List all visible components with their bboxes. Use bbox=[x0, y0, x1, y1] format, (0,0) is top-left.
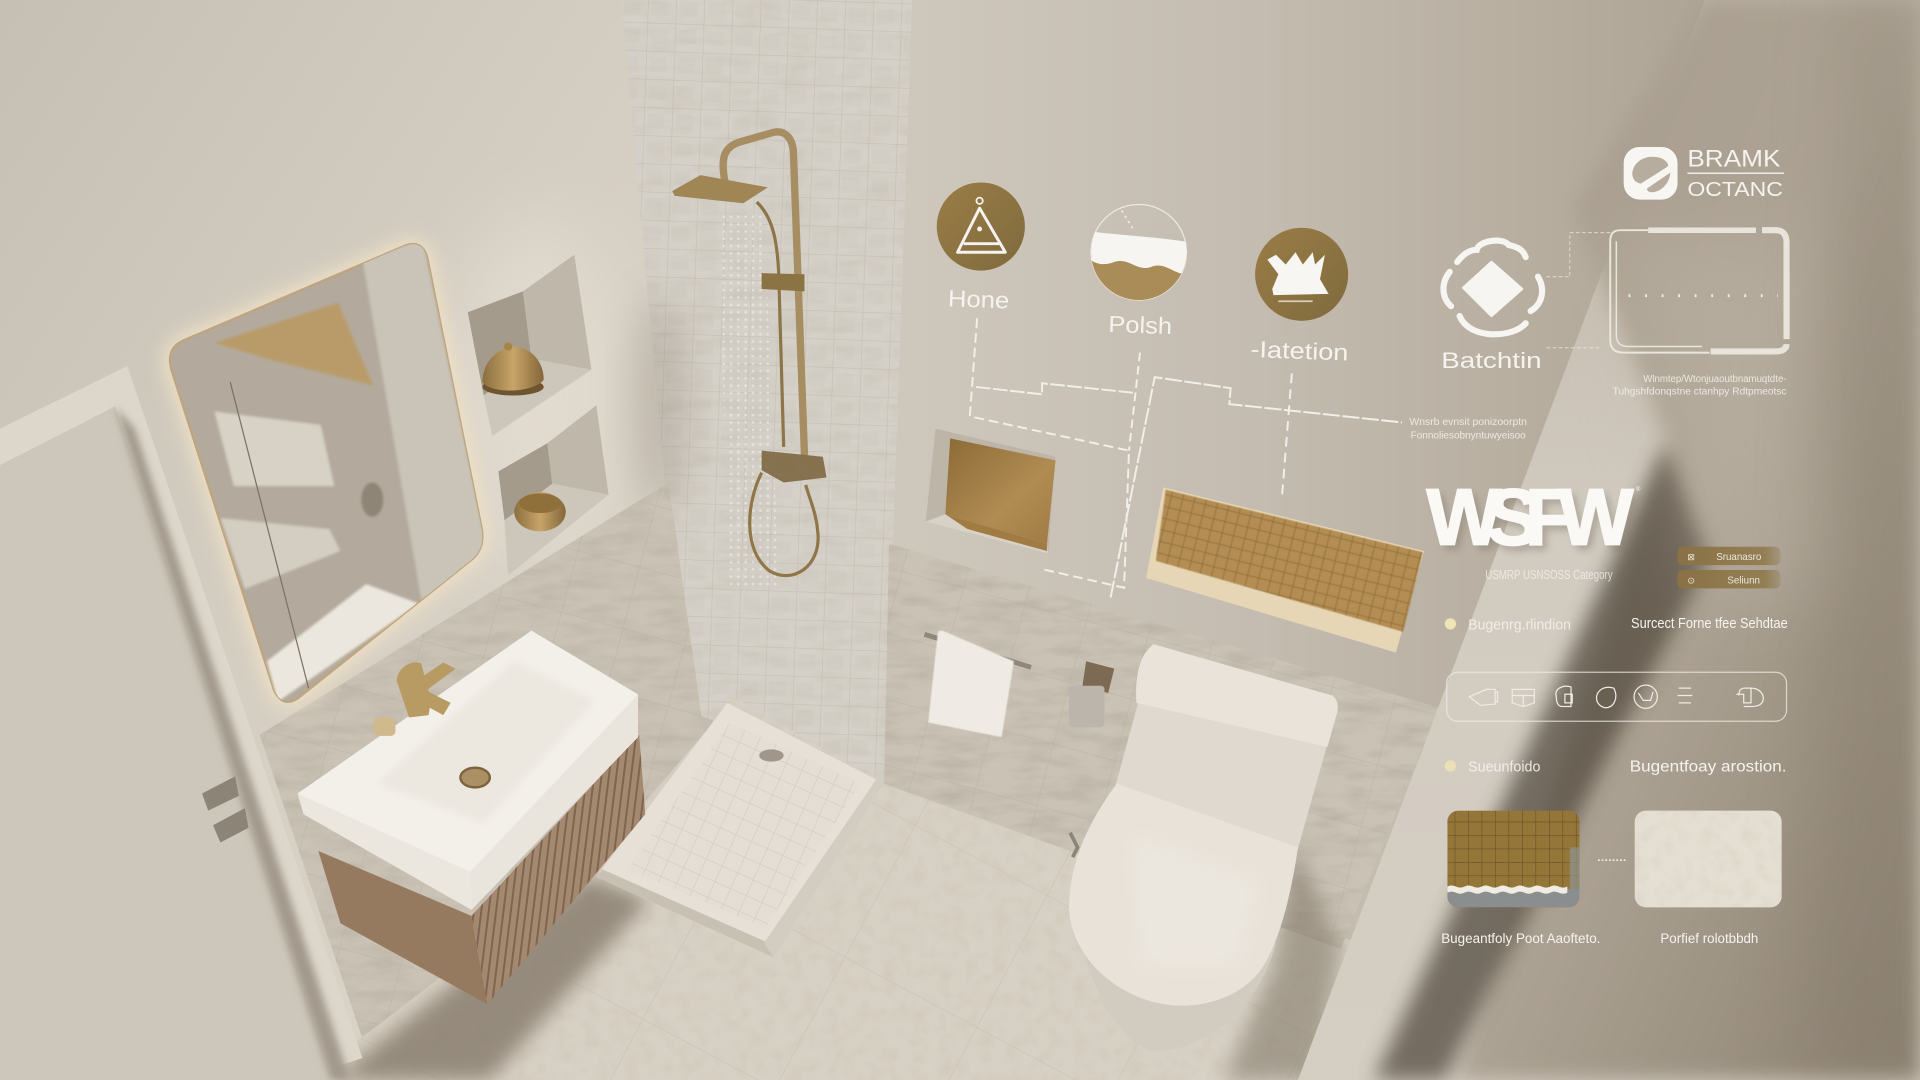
brass bell bbox=[482, 342, 544, 396]
connector: batching bbox=[1547, 233, 1613, 348]
tag: selium bbox=[1678, 570, 1780, 588]
icon: tray bbox=[1512, 689, 1534, 707]
towel and bar bbox=[924, 631, 1031, 737]
dashed connector lines bbox=[970, 233, 1613, 598]
big wordmark: WSFW bbox=[1431, 478, 1639, 567]
cabinet fluted front bbox=[471, 735, 645, 1004]
door leaf bbox=[0, 407, 333, 1080]
step icon: polish bbox=[1090, 204, 1190, 300]
mirror glow bbox=[170, 244, 482, 702]
basin bowl bbox=[377, 661, 595, 823]
soft highlight on the right plane bbox=[1604, 233, 1837, 612]
row 2 labels bbox=[1445, 758, 1787, 775]
row 1 labels: Bugenrg.rlindion bbox=[1468, 617, 1571, 633]
connector: hone bbox=[970, 318, 1129, 588]
niche reveal bbox=[926, 429, 1056, 553]
toilet bowl base bbox=[1075, 906, 1276, 1051]
icon strip bbox=[1447, 672, 1787, 721]
lower niche back bbox=[547, 405, 609, 495]
label: polish: Polsh bbox=[1108, 311, 1173, 339]
paper holder bbox=[1069, 661, 1114, 727]
left wainscot veining bbox=[260, 482, 704, 1053]
upper niche side bbox=[468, 291, 531, 396]
niche cream frame bbox=[1146, 487, 1424, 653]
swatch captions: Bugeantfoly Poot Aaofteto. bbox=[1441, 930, 1600, 946]
tag: standard: ⊠ bbox=[1687, 552, 1695, 562]
icon: bowl bbox=[1469, 689, 1498, 705]
niche ledge bbox=[926, 514, 1048, 553]
mosaic bbox=[1156, 490, 1423, 632]
left wall highlight bbox=[453, 220, 624, 563]
connector: polish bbox=[1129, 353, 1140, 451]
basin outer bbox=[298, 631, 638, 910]
mirror reflection bbox=[214, 239, 490, 702]
shower head bbox=[672, 175, 768, 203]
shower fixture bbox=[672, 132, 827, 588]
right wall darker plane bbox=[1457, 0, 1920, 1080]
door frame bbox=[0, 366, 362, 1068]
panel description: Wlnmtep/Wtonjuaoutbnamuqtdte- bbox=[1643, 373, 1787, 385]
seat highlight bbox=[1133, 833, 1261, 967]
connector: rotation bbox=[1282, 373, 1292, 496]
swatch: gold mosaic bbox=[1447, 811, 1580, 907]
bullet bbox=[1445, 760, 1456, 772]
row 2 labels: Bugentfoay arostion. bbox=[1630, 758, 1787, 775]
icon: jar bbox=[1556, 686, 1572, 707]
basin front face bbox=[298, 793, 471, 910]
icon: leaf bbox=[1596, 687, 1616, 708]
sliding clamp bbox=[762, 273, 804, 291]
row 1 labels: Surcect Forne tfee Sehdtae bbox=[1631, 616, 1788, 632]
note near connectors bbox=[1409, 416, 1527, 441]
hand hose bbox=[750, 473, 818, 576]
outlined panel with dotted scale bbox=[1610, 230, 1787, 353]
wordmark subtitle: USMRP USNSOSS Category bbox=[1485, 567, 1613, 582]
lower niche floor bbox=[504, 484, 609, 576]
floor pipe bbox=[1070, 833, 1078, 857]
toilet tank body bbox=[1109, 700, 1327, 857]
row 1 labels bbox=[1445, 616, 1788, 633]
shower wall shadow bbox=[632, 294, 686, 514]
panel description bbox=[1613, 373, 1787, 397]
water spray bbox=[718, 211, 779, 588]
upper niche back bbox=[523, 255, 591, 370]
recessed gold niche bbox=[926, 429, 1056, 553]
swatch connector bbox=[1598, 859, 1627, 861]
logo text: BRAMK bbox=[1687, 146, 1780, 173]
toilet lid bbox=[1136, 644, 1338, 747]
niche gold back bbox=[945, 438, 1056, 544]
shower tile wall bbox=[621, 0, 912, 784]
icon: drum bbox=[1634, 685, 1657, 708]
bullet bbox=[1445, 618, 1456, 630]
left wainscot tile bbox=[260, 482, 704, 1053]
upper niche floor bbox=[484, 359, 591, 436]
brass dish bbox=[514, 492, 566, 531]
back wall bbox=[882, 0, 1714, 759]
swatch captions bbox=[1441, 930, 1758, 946]
logo bbox=[1624, 146, 1784, 201]
toilet seat bbox=[1069, 784, 1298, 1006]
tag: standard: Sruanasro bbox=[1716, 552, 1762, 563]
step icon: rotation bbox=[1255, 228, 1348, 321]
tag: selium: Seliunn bbox=[1727, 575, 1760, 586]
shower tile veining bbox=[621, 0, 912, 784]
step icon: batching bbox=[1443, 241, 1542, 334]
right wall light band bbox=[1298, 0, 1920, 1080]
row 2 labels: Sueunfoido bbox=[1468, 759, 1540, 775]
logo mark bbox=[1624, 147, 1678, 200]
mirror glass bbox=[170, 244, 482, 702]
panel description: Tuhgshfdonqstne ctanhpy Rdtpmeotsc bbox=[1613, 385, 1787, 397]
left wall bbox=[0, 0, 692, 1080]
shadow under vanity bbox=[333, 877, 649, 1080]
swatch captions: Porfief rolotbbdh bbox=[1660, 930, 1758, 946]
step icon: hone bbox=[937, 182, 1025, 271]
right edge vignette bbox=[1800, 0, 1920, 1080]
shadow right of toilet bbox=[1224, 845, 1341, 1080]
hinge bbox=[202, 776, 249, 842]
connector: hone steps bbox=[976, 383, 1136, 394]
big wordmark: ® bbox=[1636, 486, 1641, 493]
connector: rotation steps bbox=[1111, 377, 1402, 598]
dark shadow band bbox=[1374, 443, 1709, 1080]
gold mosaic niche bbox=[1146, 487, 1424, 653]
logo: OCTANC bbox=[1687, 179, 1783, 201]
cabinet side bbox=[318, 851, 487, 1004]
lower niche side bbox=[498, 443, 552, 520]
tag pills bbox=[1678, 547, 1780, 588]
label: rotation: -Iatetion bbox=[1250, 336, 1349, 365]
icon: stacked lines bbox=[1678, 688, 1692, 703]
big wordmark: WSFW bbox=[1427, 472, 1634, 561]
door bbox=[0, 366, 362, 1080]
swatch: stone bbox=[1635, 811, 1782, 907]
shower hose bbox=[757, 202, 784, 447]
niches bbox=[468, 255, 609, 576]
floor veining bbox=[306, 698, 1359, 1080]
back wainscot veining bbox=[884, 544, 1439, 949]
mirror with glow bbox=[170, 239, 490, 702]
back wainscot tile bbox=[884, 544, 1439, 949]
riser pipe bbox=[723, 132, 804, 456]
floor bbox=[306, 698, 1359, 1080]
note near connectors: Fonnoliesobnyntuwyeisoo bbox=[1411, 429, 1526, 441]
icon: cabinet bbox=[1736, 688, 1763, 707]
drain bbox=[460, 768, 490, 787]
label: hone: Hone bbox=[948, 285, 1010, 313]
label: batching: Batchtin bbox=[1441, 348, 1542, 373]
door reveal shadow bbox=[115, 407, 350, 1080]
tag: selium: ⊙ bbox=[1687, 575, 1695, 585]
mixer valve bbox=[762, 451, 827, 482]
faucet bbox=[373, 662, 456, 736]
toilet bbox=[1069, 644, 1338, 1051]
note near connectors: Wnsrb evnsit ponizoorptn bbox=[1409, 416, 1527, 428]
vanity bbox=[298, 631, 645, 1004]
shower tray bbox=[596, 703, 884, 958]
tag: standard bbox=[1678, 547, 1780, 565]
